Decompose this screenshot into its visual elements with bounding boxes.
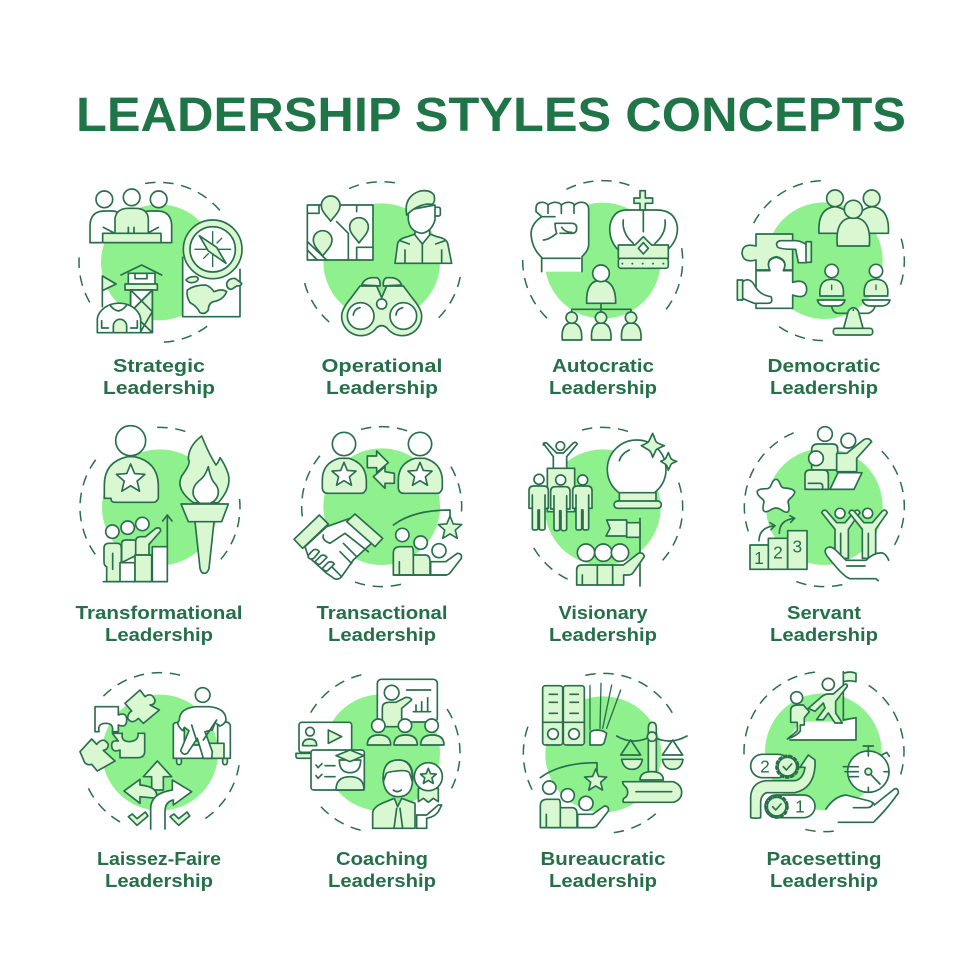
label: Leadership: Leadership [770, 871, 878, 891]
icon: transactional leadership [285, 410, 479, 604]
panel: Democratic Leadership [725, 162, 923, 398]
panel: Coaching Leadership [269, 642, 491, 891]
icon: bureaucratic leadership [490, 640, 716, 866]
label: Laissez-Faire: Laissez-Faire [97, 849, 221, 869]
label: Leadership: Leadership [328, 871, 436, 891]
icon: strategic leadership [47, 150, 271, 374]
panel: Servant Leadership [711, 394, 937, 645]
icon: autocratic leadership [511, 169, 694, 352]
label: Leadership: Leadership [103, 378, 215, 398]
title: LEADERSHIP STYLES CONCEPTS [76, 88, 906, 142]
podium digit 1: 1 [754, 548, 764, 568]
icon: pacesetting leadership [713, 641, 935, 863]
panel: Pacesetting Leadership [713, 641, 935, 891]
label: Bureaucratic: Bureaucratic [540, 849, 666, 869]
icon: visionary leadership [502, 407, 703, 608]
icon: coaching leadership [269, 642, 491, 863]
label: Pacesetting: Pacesetting [766, 849, 882, 869]
label: Operational: Operational [322, 356, 442, 376]
label: Leadership: Leadership [770, 378, 878, 398]
panel: Laissez-Faire Leadership [68, 661, 252, 891]
digit 2: 2 [760, 756, 770, 776]
label: Leadership: Leadership [326, 378, 438, 398]
label: Strategic: Strategic [113, 356, 205, 376]
label: Autocratic: Autocratic [552, 356, 654, 376]
label: Coaching: Coaching [336, 849, 428, 869]
digit 1: 1 [795, 797, 805, 817]
label: Transactional: Transactional [316, 603, 448, 623]
label: Leadership: Leadership [549, 625, 657, 645]
label: Leadership: Leadership [105, 625, 213, 645]
label: Leadership: Leadership [549, 871, 657, 891]
icon: democratic leadership [725, 162, 923, 360]
icon: servant leadership [711, 394, 937, 620]
panel: Autocratic Leadership [511, 169, 694, 398]
icon: laissez-faire leadership [68, 661, 252, 844]
panel: Bureaucratic Leadership [490, 640, 716, 891]
panel: Transformational Leadership [72, 419, 248, 645]
panel: Strategic Leadership [47, 150, 271, 398]
label: Visionary: Visionary [558, 603, 648, 623]
label: Leadership: Leadership [549, 378, 657, 398]
podium digit 3: 3 [793, 536, 802, 556]
label: Democratic: Democratic [768, 356, 880, 376]
label: Leadership: Leadership [105, 871, 213, 891]
podium digit 2: 2 [773, 543, 783, 563]
icon: transformational leadership [72, 419, 248, 595]
panel: Transactional Leadership [285, 410, 479, 645]
label: Servant: Servant [787, 603, 861, 623]
panel: Visionary Leadership [502, 407, 703, 645]
label: Leadership: Leadership [770, 625, 878, 645]
icon: operational leadership [288, 168, 475, 355]
label: Transformational: Transformational [76, 603, 242, 623]
label: Leadership: Leadership [328, 625, 436, 645]
panel: Operational Leadership [288, 168, 475, 398]
